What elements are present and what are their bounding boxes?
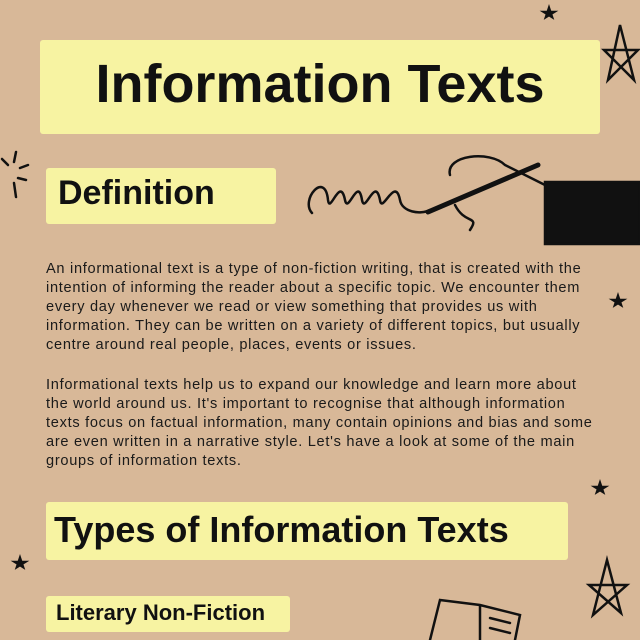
paragraph 2: groups of information texts. — [46, 453, 242, 469]
definition band — [46, 168, 276, 224]
heading: types: Types of Information Texts — [54, 509, 509, 550]
paragraph 2: are even written in a narrative style. Let's have a look at some of the main — [46, 434, 575, 450]
paragraph 1 — [46, 261, 581, 353]
heading: literary non-fiction: Literary Non-Fiction — [56, 600, 265, 625]
paragraph 2: the world around us. It's important to recognise that although information — [46, 396, 565, 412]
title: Information Texts — [95, 54, 545, 114]
paragraph 2 — [46, 377, 593, 469]
icon: hand writing — [309, 156, 640, 244]
paragraph 1: centre around real people, places, events or issues. — [46, 337, 417, 353]
types band — [46, 502, 568, 560]
literary band — [46, 596, 290, 632]
paragraph 1: An informational text is a type of non-fiction writing, that is created with the — [46, 261, 581, 277]
paragraph 1: information. They can be written on a variety of different topics, but usually — [46, 318, 580, 334]
title band — [40, 40, 600, 134]
paragraph 1: intention of informing the reader about a specific topic. We encounter them — [46, 280, 580, 296]
paragraph 1: every day whenever we read or view something that provides us with — [46, 299, 538, 315]
heading: definition: Definition — [58, 174, 215, 212]
icon: book — [430, 600, 520, 640]
paragraph 2: texts focus on factual information, many contain opinions and bias and some — [46, 415, 593, 431]
paragraph 2: Informational texts help us to expand our knowledge and learn more about — [46, 377, 577, 393]
